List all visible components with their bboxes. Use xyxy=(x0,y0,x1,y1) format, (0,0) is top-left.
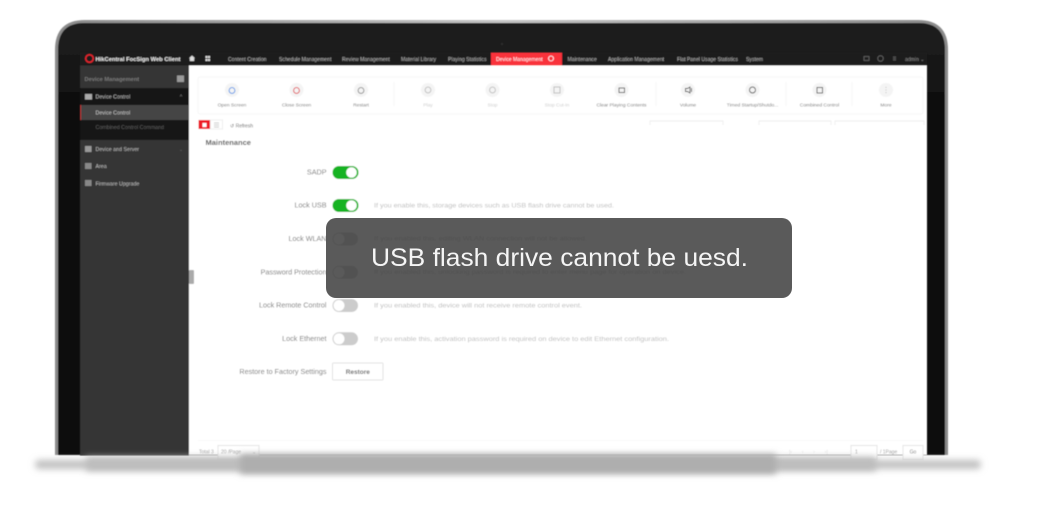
command toolbar: Clear Playing Contents xyxy=(596,102,647,108)
sidebar: Device Control xyxy=(96,95,130,101)
command toolbar: Close Screen xyxy=(282,102,311,108)
view switch and refresh: ↺ Refresh xyxy=(230,124,253,130)
settings form: Lock Ethernet xyxy=(282,334,326,343)
settings form: Password Protection xyxy=(261,267,326,276)
sidebar collapse handle xyxy=(189,270,194,284)
command toolbar: Restart xyxy=(353,102,370,108)
settings form: Lock Remote Control xyxy=(259,300,327,310)
laptop frame xyxy=(55,20,948,455)
restore button xyxy=(332,363,383,380)
command toolbar: Stop xyxy=(487,102,498,108)
toast message xyxy=(326,218,792,298)
command toolbar: Combined Control xyxy=(800,102,839,108)
heading: maintenance: Maintenance xyxy=(206,138,251,147)
settings form: SADP xyxy=(307,168,327,176)
sidebar: Firmware Upgrade xyxy=(96,182,139,188)
settings form: If you enabled this, unlocking password is required to enter menu page for operation on device. xyxy=(374,269,686,276)
pagination: Total 3 xyxy=(199,450,214,456)
command toolbar: Volume xyxy=(680,102,696,108)
toggle: off xyxy=(332,232,358,345)
command toolbar: More xyxy=(880,102,892,108)
view switch and refresh xyxy=(198,120,924,130)
sidebar: Combined Control Command xyxy=(96,125,164,131)
laptop base shadow xyxy=(35,454,981,474)
sidebar: Device Management xyxy=(84,77,139,83)
settings form xyxy=(239,166,686,380)
settings form: Restore to Factory Settings xyxy=(239,367,327,376)
sidebar: ^ xyxy=(180,95,183,101)
top navigation bar: Maintenance xyxy=(568,57,597,63)
pagination: / 1Page xyxy=(880,450,897,456)
top navigation bar: System xyxy=(746,57,763,63)
sidebar: Device and Server xyxy=(96,147,139,153)
pagination: 1 xyxy=(855,450,858,456)
top navigation bar: Content Creation xyxy=(228,57,267,63)
settings form: Lock USB xyxy=(295,200,327,210)
top navigation bar: Material Library xyxy=(401,57,437,63)
command toolbar: Timed Startup/Shutdo... xyxy=(727,102,778,108)
sidebar: Area xyxy=(96,164,107,170)
settings form: If you enabled this, editing WLAN connection will not be allowed. xyxy=(374,236,587,242)
top navigation bar: admin ⌄ xyxy=(905,57,925,63)
top navigation bar: HikCentral FocSign Web Client xyxy=(96,57,180,63)
screen xyxy=(80,52,927,460)
settings form: If you enable this, activation password is required on device to edit Ethernet configuration. xyxy=(374,336,669,343)
top navigation bar: Schedule Management xyxy=(279,57,332,63)
command toolbar: Open Screen xyxy=(218,102,247,108)
settings form: If you enabled this, device will not receive remote control event. xyxy=(374,302,582,310)
toast message: USB flash drive cannot be uesd. xyxy=(371,244,748,272)
top navigation bar: Application Management xyxy=(608,57,665,63)
top navigation bar xyxy=(80,52,927,66)
sidebar: Device Control xyxy=(96,110,130,116)
top navigation bar: Device Management xyxy=(496,57,543,63)
settings form: If you enable this, storage devices such as USB flash drive cannot be used. xyxy=(374,202,614,210)
pagination xyxy=(198,440,923,460)
top navigation bar: Review Management xyxy=(342,57,390,63)
toggle: on xyxy=(332,166,358,212)
sidebar: ⌄ xyxy=(179,147,183,153)
command toolbar: Play xyxy=(423,102,433,108)
pagination: Go xyxy=(910,450,917,456)
top navigation bar: Playing Statistics xyxy=(448,57,487,63)
pagination: 20 /Page xyxy=(221,450,241,456)
sidebar xyxy=(80,66,189,456)
restore button: Restore xyxy=(346,369,370,376)
settings form: Lock WLAN xyxy=(289,234,326,243)
command toolbar xyxy=(198,77,923,114)
pagination: ⌄ xyxy=(252,450,256,456)
pagination: |‹ ‹ › ›| xyxy=(789,450,828,456)
command toolbar: Stop Cut-In xyxy=(545,102,570,108)
top navigation bar: Flat Panel Usage Statistics xyxy=(677,57,738,63)
